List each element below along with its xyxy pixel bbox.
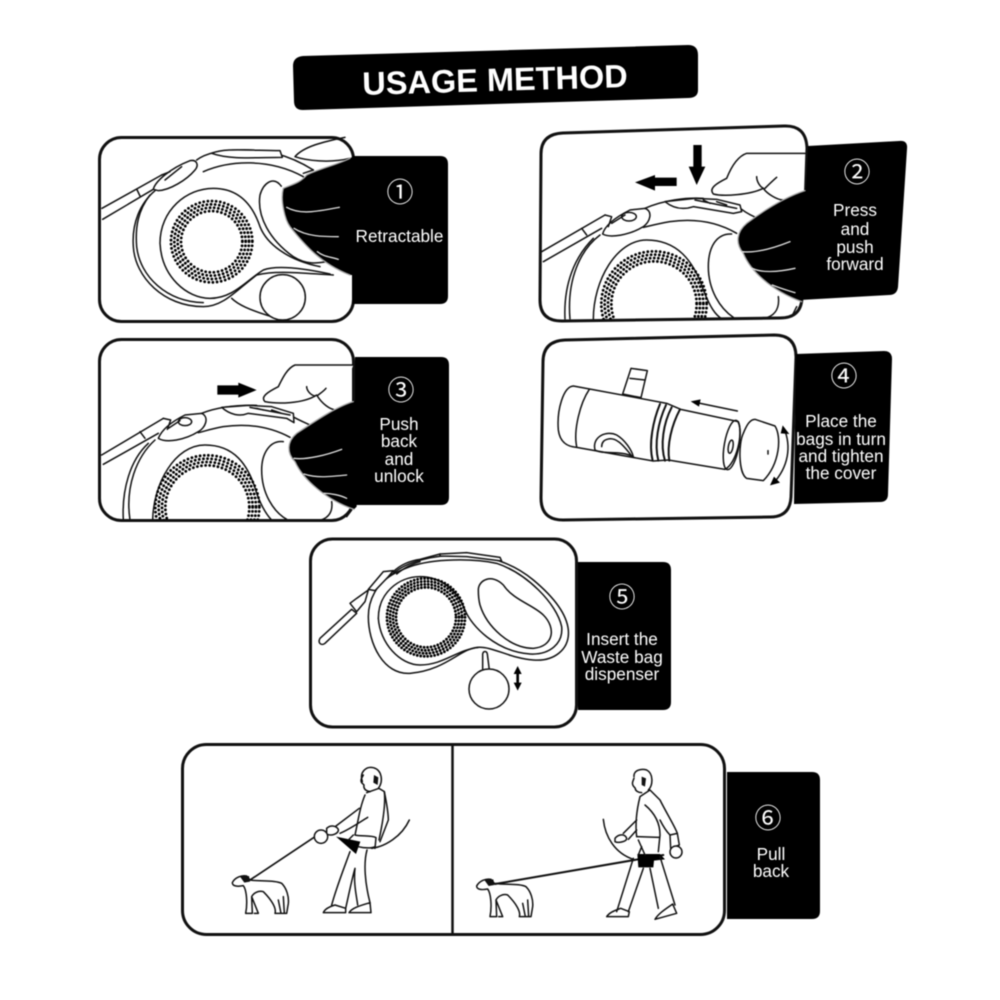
step 2 leash reel illustration [541, 196, 798, 320]
step 3 caption: Push [379, 414, 419, 434]
icon: right arrow [217, 383, 257, 398]
step 3 label box [289, 357, 449, 509]
step 2 caption: Press [833, 200, 877, 220]
step 2 label box [738, 141, 907, 302]
step 3 caption: and [385, 449, 413, 469]
step 5 frame [310, 539, 576, 727]
scene: person walking dog on long leash [232, 767, 409, 913]
step 2 caption: and [841, 219, 869, 239]
dog [232, 876, 288, 913]
step 2 frame [540, 126, 807, 321]
panel: step 3 push back and unlock [97, 337, 450, 523]
step 6 frame [182, 744, 724, 934]
step 1 frame [100, 138, 354, 322]
step 4 caption: and tighten [798, 446, 884, 466]
step 4 number: ④ [830, 355, 858, 394]
step 5 number: ⑤ [608, 576, 636, 615]
step 1 number: ① [386, 171, 414, 210]
step 5 caption: dispenser [585, 664, 660, 684]
title banner [293, 45, 698, 110]
panel: step 2 press and push forward [538, 124, 908, 324]
step 3 hand [289, 401, 357, 509]
step 3 finger [264, 365, 353, 410]
step 3 caption: back [381, 431, 418, 451]
leash [495, 855, 663, 884]
step 1 leash reel illustration [102, 137, 350, 320]
title background [293, 45, 698, 110]
panel: step 6 pull back [182, 744, 820, 934]
step 4 caption: bags in turn [796, 429, 886, 449]
panel: step 1 retractable [100, 137, 448, 322]
step 1 caption: Retractable [356, 226, 443, 246]
step 5 caption: Insert the [586, 629, 658, 649]
bag dispenser cylinder illustration [558, 368, 789, 485]
step 4 caption: Place the [805, 411, 877, 431]
step 4 label box [794, 351, 892, 504]
person [361, 767, 381, 792]
step 4 frame [541, 335, 796, 520]
panel: step 4 place the bags [541, 335, 892, 520]
step 5 label box [578, 562, 671, 710]
step 6 caption: Pull [757, 844, 785, 864]
step 2 hand [738, 189, 813, 302]
step 2 finger [712, 153, 805, 200]
title text: USAGE METHOD [362, 58, 628, 102]
step 3 leash reel illustration [100, 404, 353, 520]
scene: person pulling back on leash [477, 769, 682, 919]
dog [477, 879, 533, 917]
leash [250, 837, 315, 880]
step 1 hand [282, 157, 357, 275]
step 2 number: ② [844, 151, 870, 190]
icon: down arrow [689, 145, 705, 185]
step 1 label box [282, 156, 448, 304]
step 6 number: ⑥ [754, 797, 782, 836]
step 6 caption: back [753, 861, 790, 881]
panel: step 5 insert the waste bag dispenser [310, 539, 671, 727]
step 5 caption: Waste bag [581, 647, 663, 667]
step 2 caption: forward [826, 254, 884, 274]
step 4 caption: the cover [806, 463, 877, 483]
step 2 caption: push [836, 237, 874, 257]
icon: left arrow [635, 175, 677, 191]
full leash reel illustration [319, 553, 568, 709]
step 3 frame [100, 340, 354, 520]
step 3 number: ③ [388, 369, 414, 408]
step 6 label box [727, 772, 820, 919]
step 3 caption: unlock [374, 466, 424, 486]
divider between scenes [451, 745, 454, 934]
person [632, 769, 652, 793]
